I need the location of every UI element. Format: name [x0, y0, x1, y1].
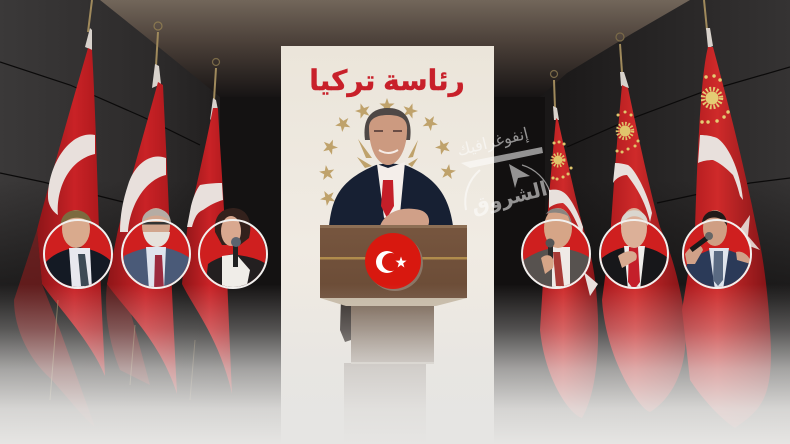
podium [320, 225, 467, 444]
panel: right flags [540, 0, 771, 428]
hand [380, 209, 429, 226]
panel: central backdrop [281, 46, 494, 444]
figure: central president [329, 108, 453, 226]
flag 1 [14, 0, 105, 427]
watermark: infographic logo: إنفوغرافيك [456, 126, 531, 161]
gold strip [320, 257, 467, 260]
flag 2 [106, 22, 177, 394]
panel: left flags [14, 0, 232, 427]
tie [381, 180, 394, 218]
suit [329, 163, 453, 226]
hair [364, 108, 411, 140]
watermark: infographic logo [456, 126, 550, 218]
flag 6 [682, 0, 771, 428]
shirt [377, 162, 405, 218]
portrait 1 [44, 210, 112, 290]
portrait 6 [683, 210, 751, 290]
portrait 3 [199, 208, 267, 290]
podium underside [320, 298, 467, 306]
flag 3 [182, 58, 232, 400]
face [369, 115, 407, 165]
podium leg shadow [340, 298, 351, 342]
icon: ring of presidential stars [318, 98, 457, 207]
fade to light grey at the bottom [0, 284, 790, 444]
podium top [320, 226, 467, 298]
icon: Turkish flag emblem [365, 233, 423, 291]
flag 4 [540, 70, 598, 418]
podium lower column [351, 298, 434, 363]
watermark: infographic logo: الشروق [469, 178, 550, 218]
flag 5 [602, 33, 686, 412]
title: رئاسة تركيا [309, 65, 465, 97]
portrait 4 [522, 208, 590, 290]
portrait 5 [600, 208, 668, 290]
portrait 2 [122, 208, 190, 290]
